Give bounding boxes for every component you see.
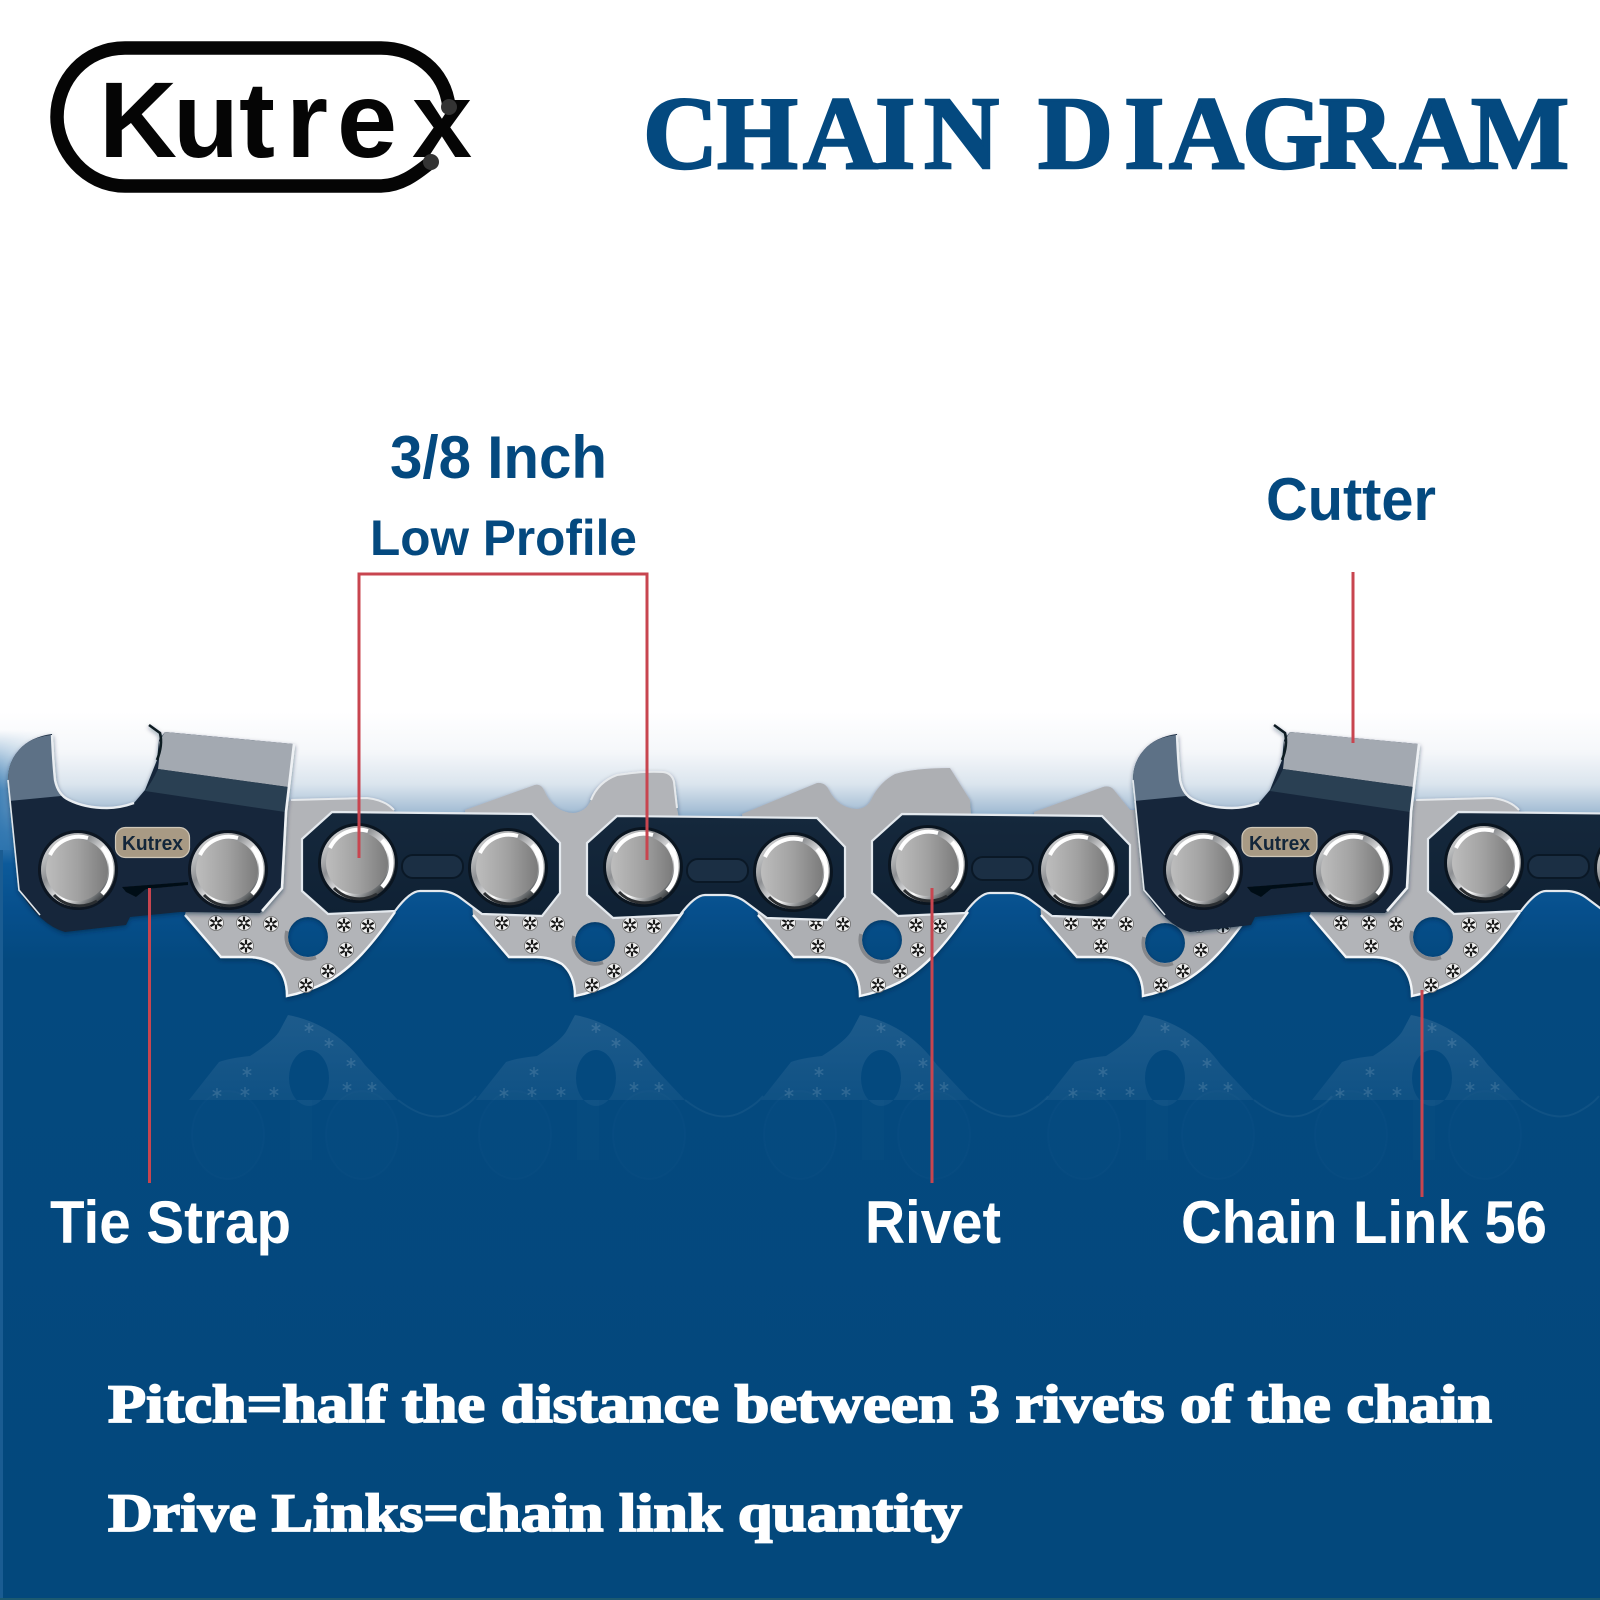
- title: CHAIN DIAGRAM: [643, 76, 1569, 191]
- cutter 1: [8, 725, 294, 932]
- tie strap side plate 4: [1428, 812, 1600, 916]
- callout: chain link line: [1420, 990, 1424, 1197]
- reflection of the chain: [189, 1015, 1599, 1179]
- drive links: [185, 768, 1525, 996]
- label: Rivet: Rivet: [865, 1189, 1001, 1256]
- label: Low Profile: Low Profile: [370, 510, 637, 566]
- callout: cutter line: [1352, 572, 1354, 743]
- note: drive links definition: Drive Links=chain link quantity: [108, 1483, 962, 1543]
- cutter 1: Kutrex: [122, 833, 183, 855]
- label: Tie Strap: Tie Strap: [50, 1189, 291, 1256]
- logo outline ring: [57, 48, 449, 186]
- callout: tie strap line: [148, 888, 151, 1183]
- callout: rivet line: [930, 888, 934, 1183]
- label: Cutter: Cutter: [1266, 466, 1436, 533]
- saw chain: [8, 725, 1600, 996]
- cutter 2: [1133, 725, 1419, 932]
- note: pitch definition: Pitch=half the distance between 3 rivets of the chain: [108, 1374, 1492, 1434]
- drive link 1: [185, 798, 400, 996]
- logo wordmark: Kutrex: [99, 59, 472, 180]
- callout: pitch bracket: [359, 574, 647, 860]
- tie strap side plate 2: [587, 816, 845, 920]
- drive link 3: [742, 768, 975, 996]
- tie strap side plate 1: [302, 812, 560, 916]
- tie strap side plate 3: [872, 814, 1130, 918]
- drive link 4: [1034, 786, 1255, 996]
- drive link 5: [1310, 798, 1525, 996]
- label: 3/8 Inch: 3/8 Inch: [390, 424, 607, 491]
- cutter 2: Kutrex: [1249, 833, 1310, 855]
- drive link 2: [465, 772, 690, 996]
- logo: Kutrex: [57, 48, 472, 186]
- label: Chain Link 56: Chain Link 56: [1181, 1189, 1547, 1256]
